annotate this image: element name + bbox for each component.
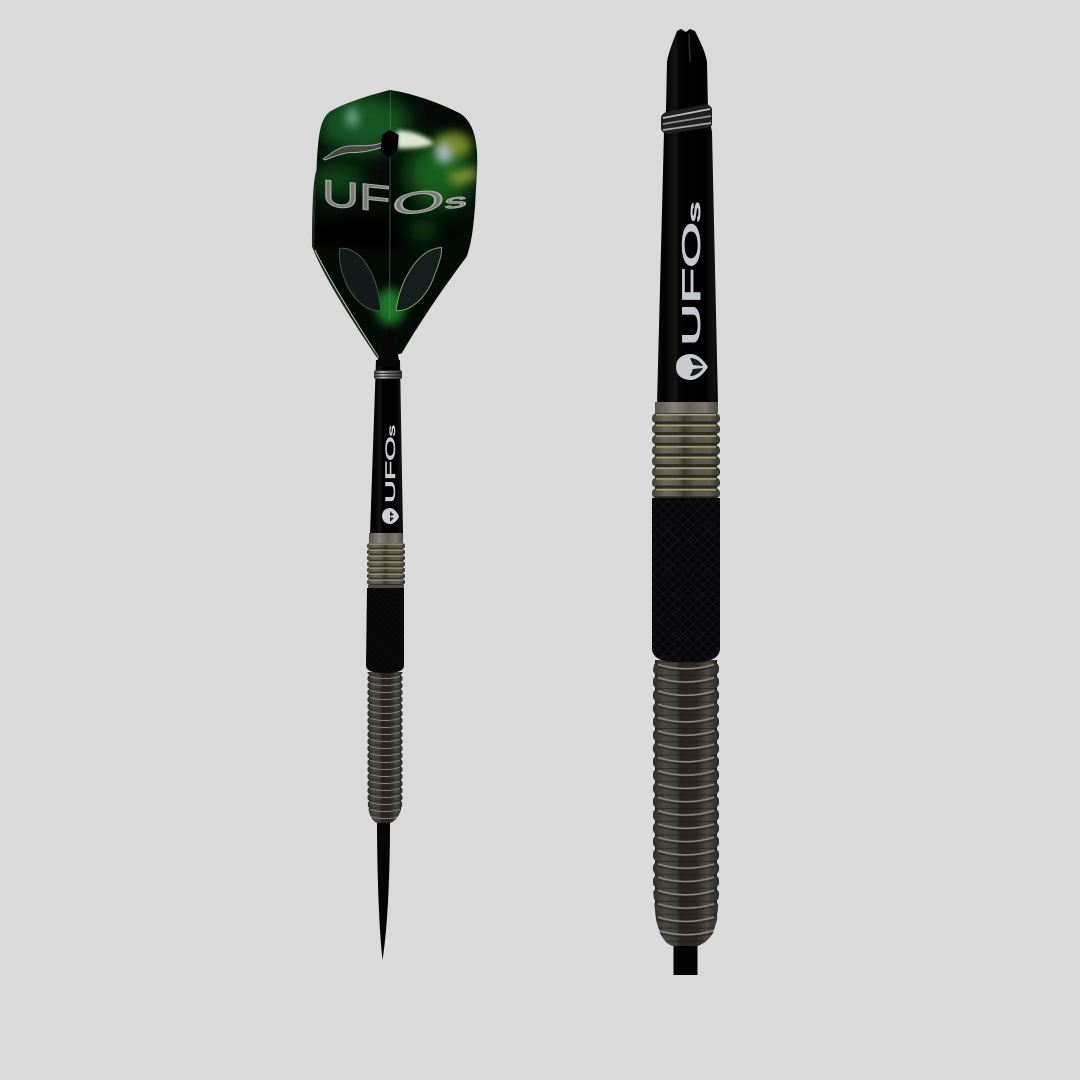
back wing highlight (313, 177, 314, 248)
green glow mid left (310, 163, 363, 197)
centre crease (389, 90, 391, 320)
right eye (396, 248, 442, 311)
close-up black knurl section (652, 498, 720, 662)
left barrel black knurl (366, 588, 404, 673)
close-up brass section (652, 402, 720, 499)
right dart: close-up barrel and shaft (652, 29, 720, 975)
flight (312, 90, 478, 358)
small dart silhouette: flight (381, 130, 399, 158)
close-up steel section (652, 660, 720, 946)
back wing edge of flight (312, 170, 380, 358)
dart steel point (377, 820, 390, 960)
white highlight (397, 131, 434, 148)
lower side green (407, 218, 440, 242)
blue light spot (437, 143, 451, 163)
stem ring (374, 370, 402, 379)
lime streak (435, 132, 472, 158)
flight logo right half: O s (392, 180, 467, 223)
blue light spot left (347, 108, 358, 127)
small dart silhouette: barrel (323, 143, 383, 160)
green glow upper (317, 93, 410, 153)
flight artwork (314, 90, 478, 356)
left eye (339, 248, 381, 311)
shaft highlight line (689, 34, 690, 62)
white edge line (315, 250, 378, 357)
green glow right (407, 140, 473, 207)
shaft ring (661, 104, 712, 134)
bottom green glow (375, 288, 405, 325)
shaft logo text: UFOs (678, 202, 706, 346)
left dart shaft (370, 360, 403, 534)
alien icon small (382, 508, 399, 524)
left dart: complete dart with flight (300, 87, 483, 960)
close-up steel point (674, 940, 698, 975)
left barrel steel section (367, 672, 403, 823)
alien icon large (676, 354, 708, 380)
flight logo left half: UF (322, 171, 390, 220)
close-up shaft (657, 29, 718, 405)
lime streak lower (447, 167, 477, 185)
left barrel brass section (367, 533, 405, 589)
shaft logo text: UFOs (382, 425, 398, 503)
black central band (314, 222, 449, 245)
flight stem (376, 326, 400, 366)
